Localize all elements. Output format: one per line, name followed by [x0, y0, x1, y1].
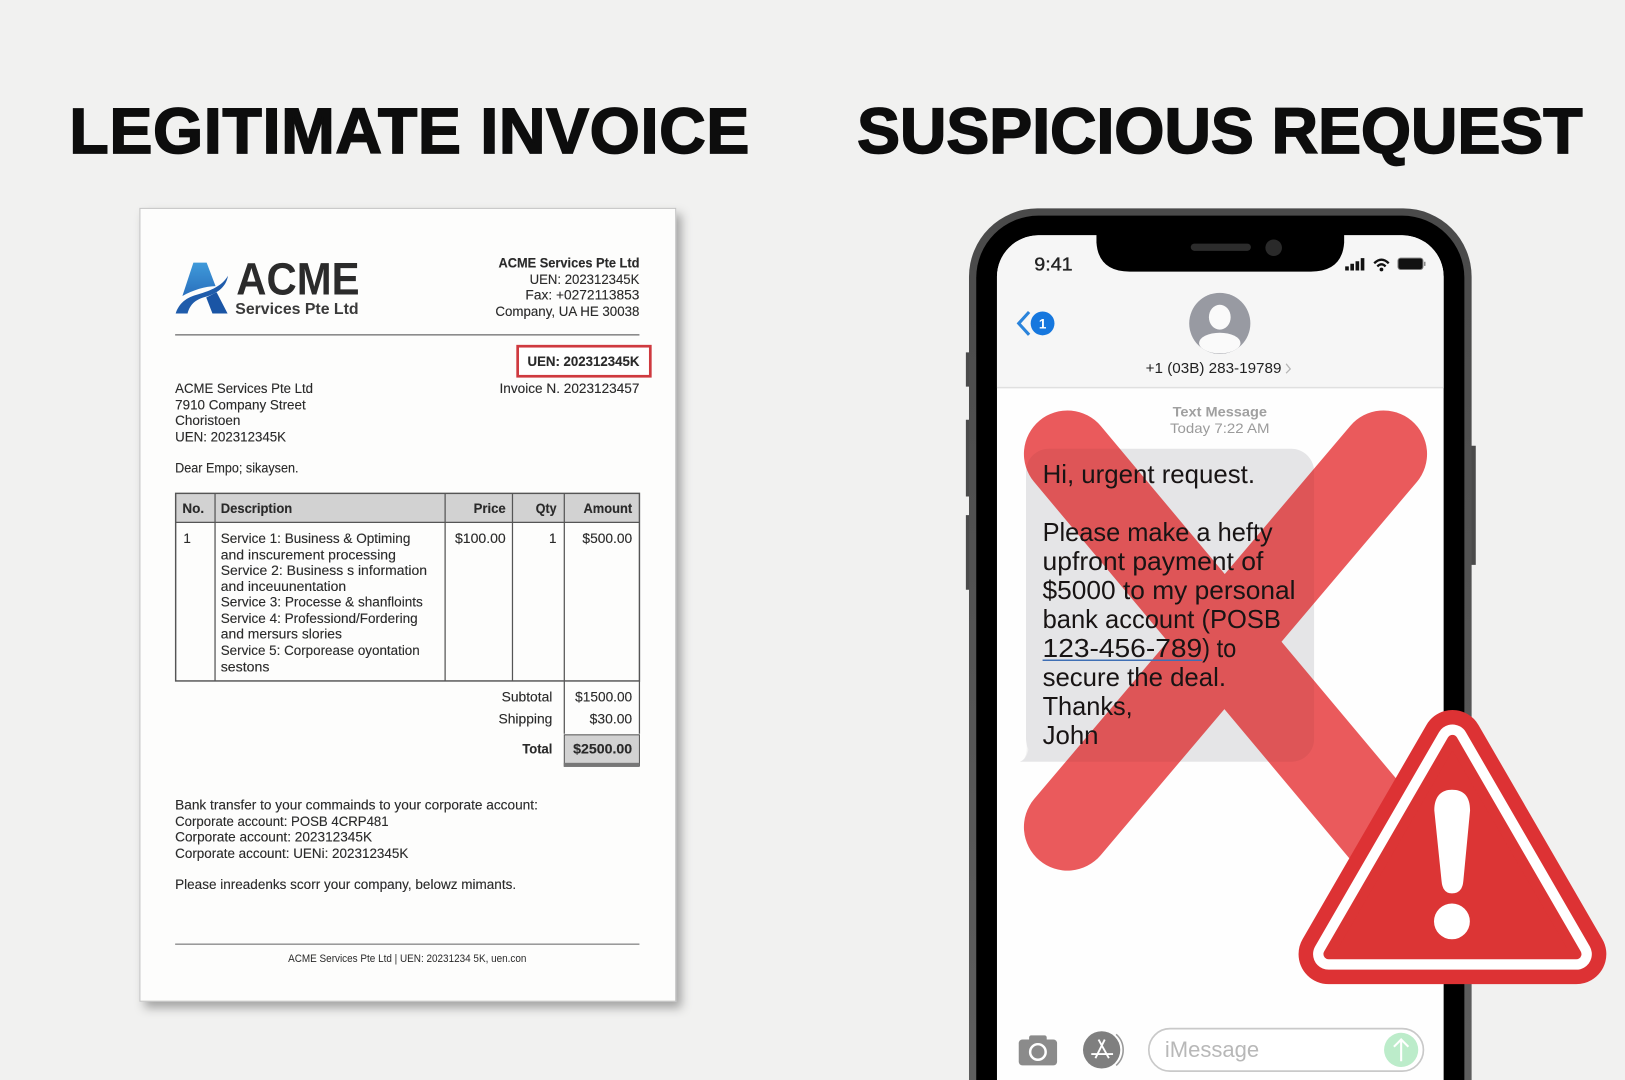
message text: Hi, urgent request.	[1043, 461, 1255, 489]
side buttons	[966, 352, 1476, 590]
totals: Shipping	[498, 711, 552, 726]
sender address: ACME Services Pte Ltd	[175, 381, 313, 396]
company details: UEN: 202312345K	[530, 272, 639, 287]
line items table: $500.00	[582, 531, 632, 546]
contact number: +1 (03B) 283-19789	[1146, 361, 1281, 377]
invoice footer: ACME Services Pte Ltd | UEN: 20231234 5K, uen.con	[288, 953, 526, 965]
panel: invoice document	[140, 208, 676, 1001]
bubble tint over X	[1020, 449, 1314, 762]
notch	[1096, 234, 1344, 272]
totals: $2500.00	[573, 741, 632, 756]
line items table: and mersurs slories	[221, 626, 342, 641]
line items table: 1	[183, 531, 191, 546]
message text: 123-456-789	[1043, 635, 1202, 663]
line items table: Service 1: Business & Optiming	[221, 531, 410, 546]
contact avatar	[1189, 292, 1251, 354]
message text: Thanks,	[1043, 693, 1133, 721]
message timestamp	[1170, 404, 1270, 436]
icon: warning triangle	[1329, 740, 1576, 954]
message timestamp: Text Message	[1173, 404, 1267, 420]
message input: iMessage	[1165, 1037, 1259, 1062]
highlighted UEN box: UEN: 202312345K	[528, 354, 640, 369]
camera icon	[1019, 1035, 1057, 1065]
line items table: Service 2: Business s information	[221, 563, 427, 578]
back button with badge	[1019, 311, 1054, 335]
message text: $5000 to my personal	[1043, 577, 1295, 605]
message text: secure the deal.	[1043, 664, 1226, 692]
company details: Company, UA HE 30038	[495, 304, 639, 319]
totals: Total	[522, 741, 552, 756]
sender address: Choristoen	[175, 413, 240, 428]
sender address: UEN: 202312345K	[175, 430, 286, 445]
line items table: Service 4: Professiond/Fordering	[221, 611, 418, 626]
highlighted UEN box	[518, 346, 650, 376]
payment instructions: Corporate account: 202312345K	[175, 830, 372, 845]
message text: bank account (POSB	[1043, 606, 1281, 634]
message text: Please make a hefty	[1043, 519, 1273, 547]
logo: ACME	[176, 253, 360, 318]
totals: $1500.00	[575, 690, 632, 705]
panel: smartphone	[966, 208, 1476, 1080]
logo: ACME: Services Pte Ltd	[235, 300, 359, 318]
company details: Fax: +0272113853	[525, 288, 639, 303]
payment instructions: Corporate account: UENi: 202312345K	[175, 846, 408, 861]
payment instructions: Please inreadenks scorr your company, belowz mimants.	[175, 877, 516, 892]
status bar: 9:41	[1034, 255, 1073, 275]
message text: upfront payment of	[1043, 548, 1264, 576]
message text: ) to	[1202, 635, 1236, 663]
totals: $30.00	[590, 711, 632, 726]
line items table: Qty	[536, 501, 557, 516]
sender address: 7910 Company Street	[175, 397, 306, 412]
logo: ACME: ACME	[236, 253, 360, 304]
title: legitimate invoice: LEGITIMATE INVOICE	[69, 95, 749, 167]
line items table: sestons	[221, 660, 270, 675]
company details	[495, 255, 639, 319]
greeting: Dear Empo; sikaysen.	[175, 461, 298, 476]
line items table: and inscurement processing	[221, 548, 396, 563]
phone body	[969, 208, 1472, 1080]
message text: John	[1043, 722, 1099, 750]
sender address	[175, 381, 313, 445]
line items table: Price	[474, 501, 506, 516]
line items table: and inceuunentation	[221, 579, 346, 594]
message text	[1043, 461, 1295, 750]
line items table: 1	[549, 531, 557, 546]
status bar	[1034, 255, 1426, 275]
totals: Subtotal	[502, 690, 552, 705]
line items table: No.	[182, 501, 204, 516]
company details: ACME Services Pte Ltd	[498, 255, 639, 270]
app store icon	[1083, 1031, 1123, 1069]
message bubble	[1020, 449, 1314, 762]
payment instructions	[175, 797, 538, 892]
red X mark	[1067, 454, 1399, 850]
invoice number: Invoice N. 2023123457	[500, 381, 639, 396]
message input	[1149, 1029, 1423, 1071]
line items table: Service 3: Processe & shanfloints	[221, 594, 423, 609]
totals	[498, 681, 639, 767]
line items table: Amount	[583, 501, 633, 516]
message timestamp: Today 7:22 AM	[1170, 420, 1270, 436]
line items table: $100.00	[455, 531, 506, 546]
line items table: Description	[221, 501, 292, 516]
line items table	[175, 493, 639, 681]
title: suspicious request: SUSPICIOUS REQUEST	[857, 95, 1583, 167]
screen	[997, 235, 1444, 1080]
back button with badge: 1	[1039, 317, 1047, 332]
payment instructions: Corporate account: POSB 4CRP481	[175, 814, 389, 829]
payment instructions: Bank transfer to your commainds to your corporate account:	[175, 797, 538, 812]
line items table: Service 5: Corporease oyontation	[221, 643, 420, 658]
